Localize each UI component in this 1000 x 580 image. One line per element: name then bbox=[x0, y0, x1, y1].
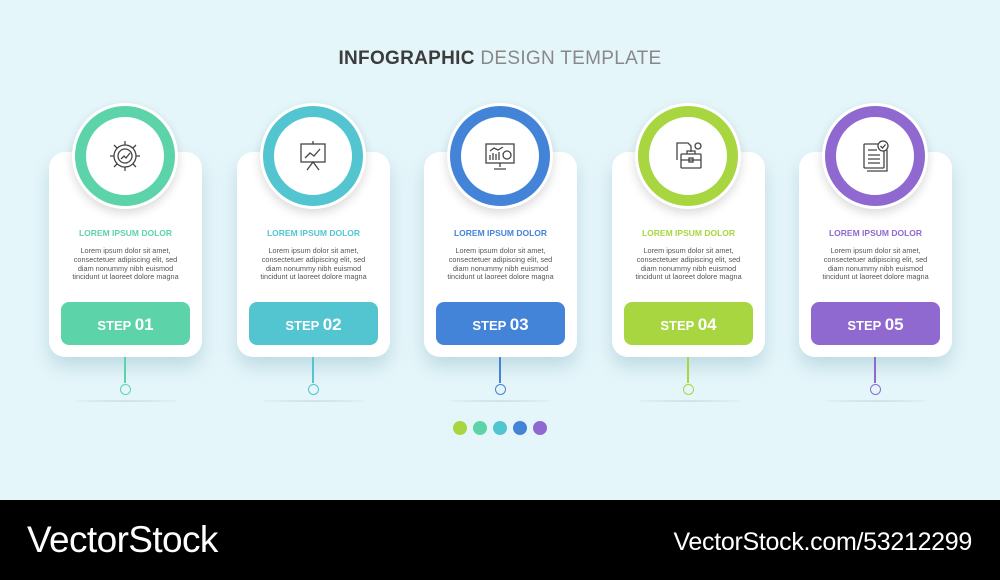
text: consectetuer adipiscing elit, sed bbox=[824, 255, 927, 264]
text: diam nonummy nibh euismod bbox=[641, 264, 736, 273]
text: consectetuer adipiscing elit, sed bbox=[637, 255, 740, 264]
text: diam nonummy nibh euismod bbox=[828, 264, 923, 273]
color dots bbox=[453, 421, 547, 435]
icon ring: monitor chart bbox=[447, 103, 553, 209]
text: Lorem ipsum dolor sit amet, bbox=[268, 246, 359, 255]
text: diam nonummy nibh euismod bbox=[453, 264, 548, 273]
text: Lorem ipsum dolor sit amet, bbox=[80, 246, 171, 255]
step button: STEP 02 bbox=[285, 315, 342, 334]
footer bbox=[0, 500, 1000, 580]
step 4 bbox=[604, 103, 772, 402]
step button: STEP 05 bbox=[847, 315, 904, 334]
step 3 bbox=[416, 103, 584, 402]
text: Lorem ipsum dolor sit amet, bbox=[455, 246, 546, 255]
heading: LOREM IPSUM DOLOR bbox=[642, 228, 735, 238]
step 2 bbox=[230, 103, 398, 402]
heading: LOREM IPSUM DOLOR bbox=[454, 228, 547, 238]
heading: LOREM IPSUM DOLOR bbox=[267, 228, 360, 238]
step 5 bbox=[792, 103, 960, 402]
text: consectetuer adipiscing elit, sed bbox=[74, 255, 177, 264]
step button: STEP 03 bbox=[472, 315, 529, 334]
text: tincidunt ut laoreet dolore magna bbox=[260, 272, 367, 281]
text: Lorem ipsum dolor sit amet, bbox=[643, 246, 734, 255]
icon ring: gear bbox=[72, 103, 178, 209]
icon ring: document check bbox=[822, 103, 928, 209]
footer url: VectorStock.com/53212299 bbox=[673, 528, 972, 556]
icon ring: briefcase bbox=[635, 103, 741, 209]
text bbox=[635, 246, 742, 281]
text bbox=[72, 246, 179, 281]
icon ring: presentation bbox=[260, 103, 366, 209]
step button bbox=[61, 302, 190, 345]
text: diam nonummy nibh euismod bbox=[266, 264, 361, 273]
footer brand: VectorStock bbox=[27, 519, 218, 560]
text bbox=[447, 246, 554, 281]
step button: STEP 04 bbox=[660, 315, 717, 334]
text: Lorem ipsum dolor sit amet, bbox=[830, 246, 921, 255]
heading: LOREM IPSUM DOLOR bbox=[79, 228, 172, 238]
step button bbox=[811, 302, 940, 345]
step button: STEP 01 bbox=[97, 315, 154, 334]
step button bbox=[624, 302, 753, 345]
step 1 bbox=[42, 103, 210, 402]
text: consectetuer adipiscing elit, sed bbox=[262, 255, 365, 264]
text bbox=[260, 246, 367, 281]
text: tincidunt ut laoreet dolore magna bbox=[635, 272, 742, 281]
title: INFOGRAPHIC DESIGN TEMPLATE bbox=[338, 48, 662, 69]
text: tincidunt ut laoreet dolore magna bbox=[822, 272, 929, 281]
step button bbox=[249, 302, 378, 345]
text: consectetuer adipiscing elit, sed bbox=[449, 255, 552, 264]
step button bbox=[436, 302, 565, 345]
text bbox=[822, 246, 929, 281]
text: diam nonummy nibh euismod bbox=[78, 264, 173, 273]
text: tincidunt ut laoreet dolore magna bbox=[72, 272, 179, 281]
heading: LOREM IPSUM DOLOR bbox=[829, 228, 922, 238]
text: tincidunt ut laoreet dolore magna bbox=[447, 272, 554, 281]
